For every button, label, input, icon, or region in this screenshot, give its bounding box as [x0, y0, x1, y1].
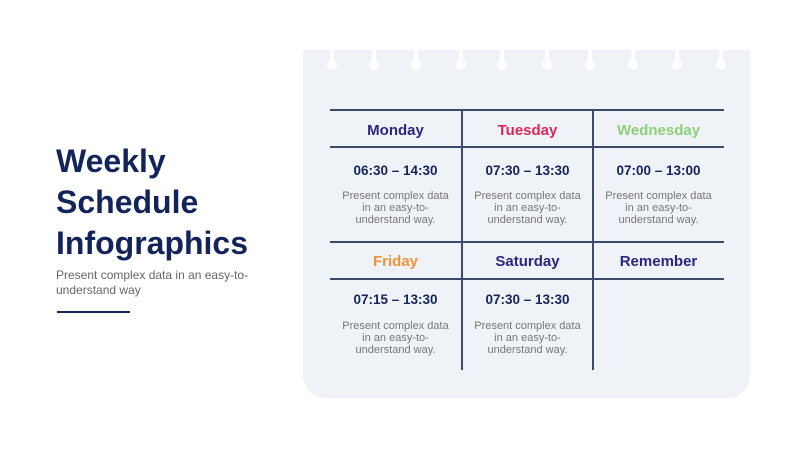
cell: Saturday: 07:30 – 13:30 [485, 292, 570, 307]
cell: Saturday: Present complex data [474, 320, 581, 332]
cell: Wednesday: 07:00 – 13:00 [616, 163, 701, 178]
cell: Friday: 07:15 – 13:30 [353, 292, 438, 307]
cell: Saturday: Saturday [495, 253, 560, 270]
cell: Wednesday: Present complex data [605, 190, 712, 202]
cell: Monday: Present complex data [342, 190, 449, 202]
cell: Wednesday [605, 122, 712, 226]
cell: Friday: Present complex data [342, 320, 449, 332]
cell: Saturday: understand way. [488, 344, 567, 356]
cell: Wednesday: understand way. [619, 214, 698, 226]
cell: Friday: understand way. [356, 344, 435, 356]
cell: Tuesday: 07:30 – 13:30 [485, 163, 570, 178]
cell: Tuesday: Present complex data [474, 190, 581, 202]
cell: Remember: Remember [620, 253, 697, 270]
cell: Tuesday: understand way. [488, 214, 567, 226]
underline accent [57, 311, 130, 313]
cell: Wednesday: Wednesday [617, 122, 700, 139]
cell: Friday [342, 253, 449, 356]
cell: Saturday [474, 253, 581, 356]
cell: Friday: Friday [373, 253, 418, 270]
title: Weekly [56, 143, 166, 179]
title [56, 143, 248, 261]
cell: Wednesday: in an easy-to- [625, 202, 692, 214]
cell: Friday: in an easy-to- [362, 332, 429, 344]
title: Schedule [56, 184, 198, 220]
title: Infographics [56, 225, 248, 261]
cell: Monday: understand way. [356, 214, 435, 226]
subtitle: Present complex data in an easy-to-understand way [56, 268, 248, 297]
cell: Monday [342, 122, 449, 226]
cell: Saturday: in an easy-to- [494, 332, 561, 344]
cell: Monday: Monday [367, 122, 424, 139]
cell: Tuesday [474, 122, 581, 226]
cell: Tuesday: Tuesday [498, 122, 557, 139]
cell: Monday: in an easy-to- [362, 202, 429, 214]
cell: Tuesday: in an easy-to- [494, 202, 561, 214]
panel: notepaper [303, 50, 750, 398]
cell: Monday: 06:30 – 14:30 [353, 163, 438, 178]
